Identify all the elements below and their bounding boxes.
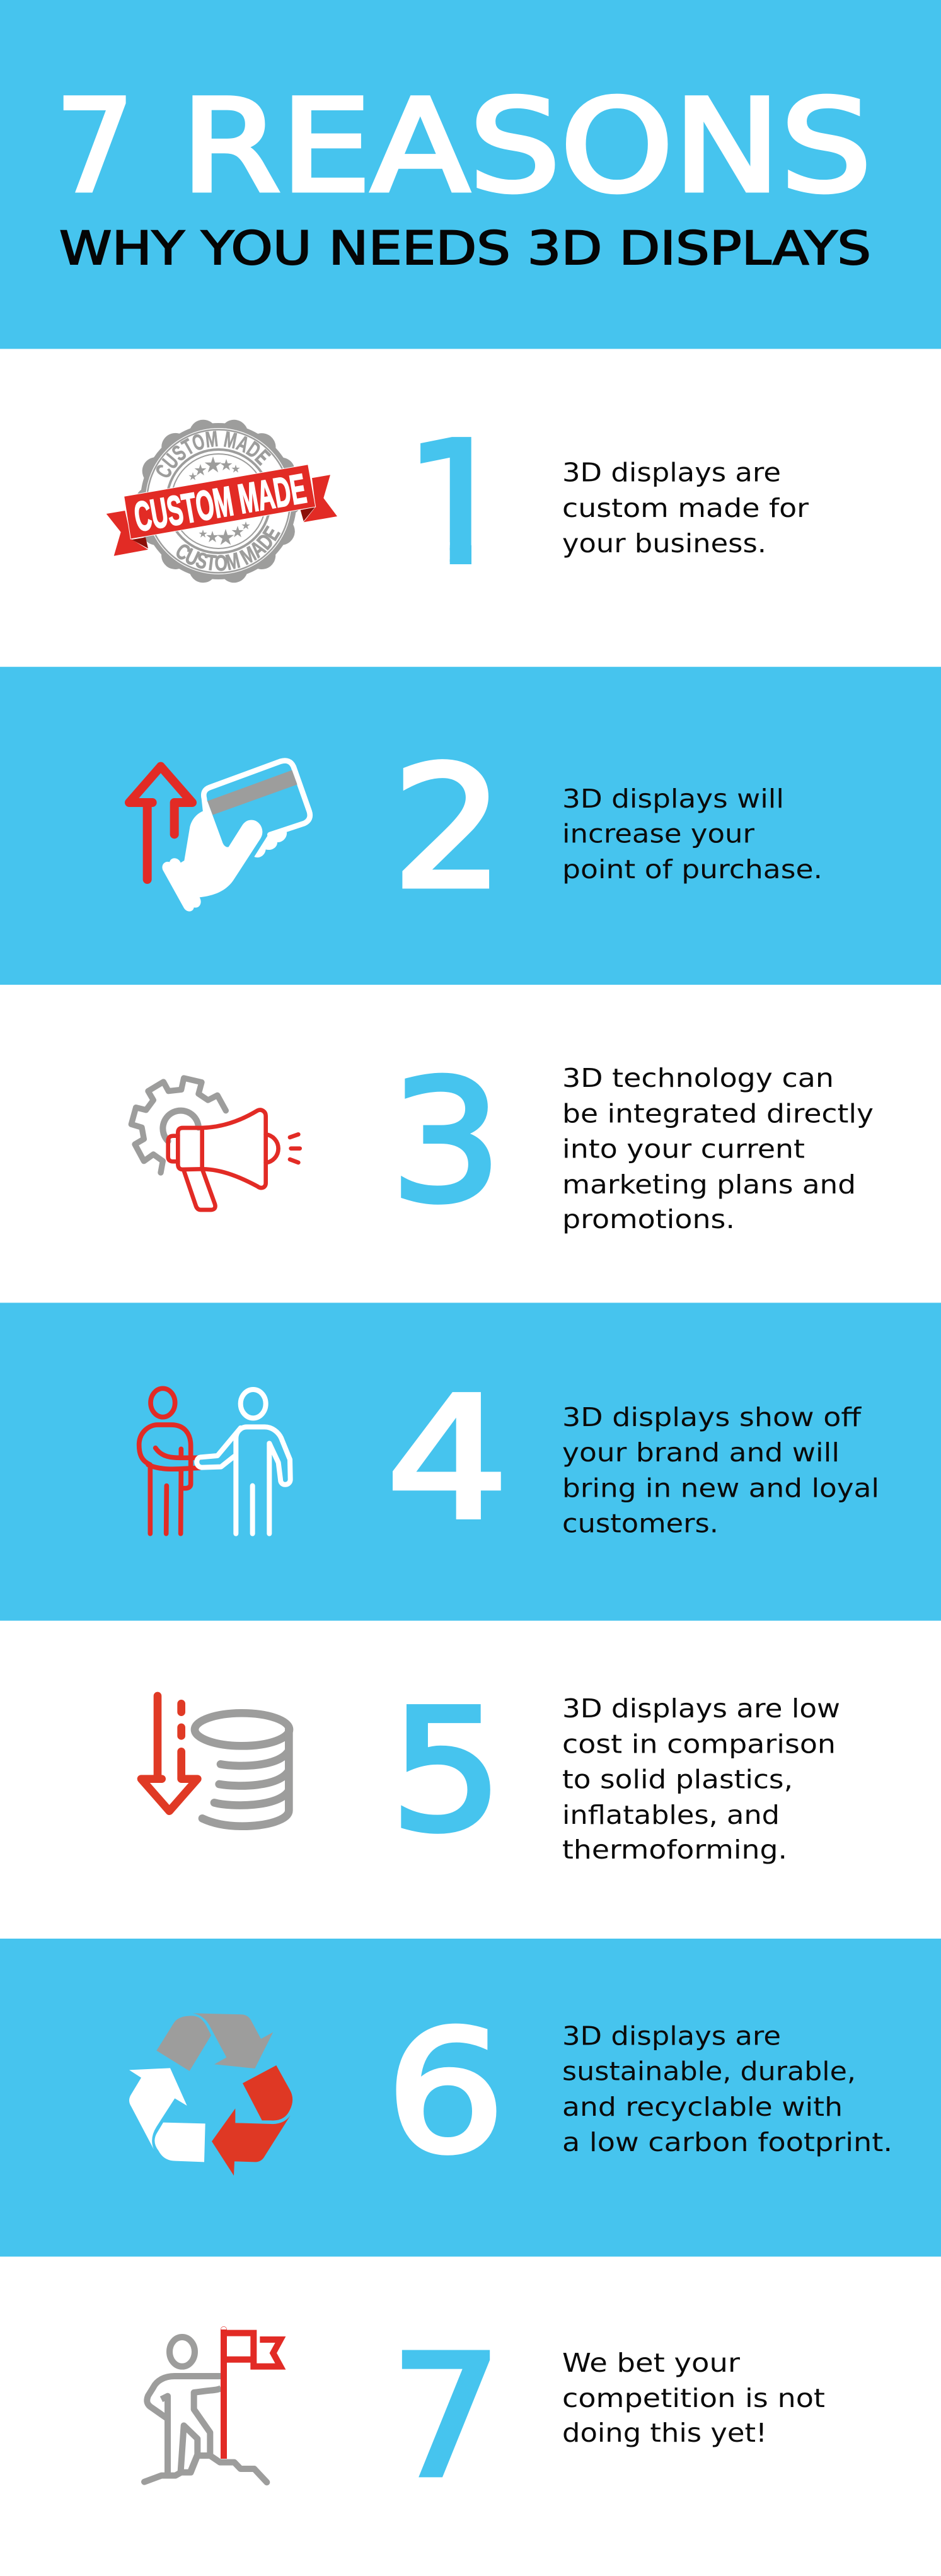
icon: custom made seal — [106, 420, 337, 583]
icon: custom made seal: CUSTOM MADE — [156, 431, 271, 478]
number 5: 5 — [390, 1674, 503, 1869]
number 4: 4 — [386, 1361, 509, 1557]
panel: reason 6 — [0, 1939, 941, 2256]
number 6: 6 — [386, 1995, 505, 2190]
number 1: 1 — [405, 406, 511, 601]
text: reason 3: promotions. — [562, 1204, 735, 1234]
title: 7 — [55, 72, 134, 221]
icon: person with flag on summit — [144, 2329, 280, 2482]
panel: reason 3 — [131, 1045, 874, 1239]
text: reason 4: your brand and will — [562, 1437, 840, 1468]
text: reason 7 — [562, 2348, 825, 2448]
text: reason 4: 3D displays show off — [562, 1402, 862, 1432]
icon: two people shaking hands — [139, 1388, 291, 1534]
text: reason 1 — [562, 458, 809, 559]
text: reason 5: 3D displays are low — [562, 1693, 840, 1724]
text: reason 1: your business. — [562, 528, 766, 559]
panel: reason 7 — [144, 2320, 825, 2515]
text: reason 2: point of purchase. — [562, 854, 823, 885]
panel: reason 1 — [106, 420, 809, 583]
text: reason 3: marketing plans and — [562, 1169, 856, 1200]
text: reason 2: 3D displays will — [562, 784, 784, 814]
text: reason 3: into your current — [562, 1134, 805, 1164]
icon: recycling arrows — [129, 2013, 292, 2176]
text: reason 3: be integrated directly — [562, 1098, 874, 1128]
text: reason 5: inflatables, and — [562, 1800, 780, 1830]
text: reason 6 — [562, 2021, 892, 2157]
text: reason 2 — [562, 784, 823, 885]
icon: custom made seal: CUSTOM MADE — [130, 465, 309, 540]
text: reason 7: competition is not — [562, 2383, 825, 2413]
text: reason 4 — [562, 1402, 879, 1539]
text: reason 4: bring in new and loyal — [562, 1473, 879, 1503]
text: reason 5 — [562, 1693, 840, 1865]
text: reason 5: cost in comparison — [562, 1729, 836, 1759]
panel: reason 4 — [0, 1303, 941, 1621]
text: reason 6: 3D displays are — [562, 2021, 781, 2051]
panel: reason 2 — [0, 667, 941, 985]
text: reason 1: 3D displays are — [562, 458, 781, 488]
icon: custom made seal: CUSTOM MADE — [176, 525, 281, 571]
text: reason 7: doing this yet! — [562, 2418, 767, 2448]
text: reason 4: customers. — [562, 1509, 719, 1539]
text: reason 3: 3D technology can — [562, 1063, 834, 1093]
subtitle: WHY YOU NEEDS 3D DISPLAYS — [59, 222, 871, 276]
text: reason 7: We bet your — [562, 2348, 740, 2378]
panel: reason 5 — [141, 1674, 840, 1869]
header panel — [0, 0, 941, 349]
title: REASONS — [181, 72, 872, 221]
text: reason 1: custom made for — [562, 493, 809, 523]
number 7: 7 — [390, 2320, 502, 2515]
text: reason 6: and recyclable with — [562, 2092, 843, 2122]
text: reason 2: increase your — [562, 818, 754, 849]
icon: down arrow and coin stack — [141, 1696, 289, 1826]
text: reason 5: thermoforming. — [562, 1835, 787, 1865]
text: reason 6: a low carbon footprint. — [562, 2127, 892, 2157]
icon: gear and megaphone — [131, 1078, 300, 1210]
text: reason 6: sustainable, durable, — [562, 2057, 856, 2087]
number 3: 3 — [390, 1045, 502, 1239]
text: reason 3 — [562, 1063, 874, 1234]
text: reason 5: to solid plastics, — [562, 1764, 793, 1794]
icon: hand with card and up arrow — [129, 761, 310, 912]
number 2: 2 — [392, 731, 504, 926]
